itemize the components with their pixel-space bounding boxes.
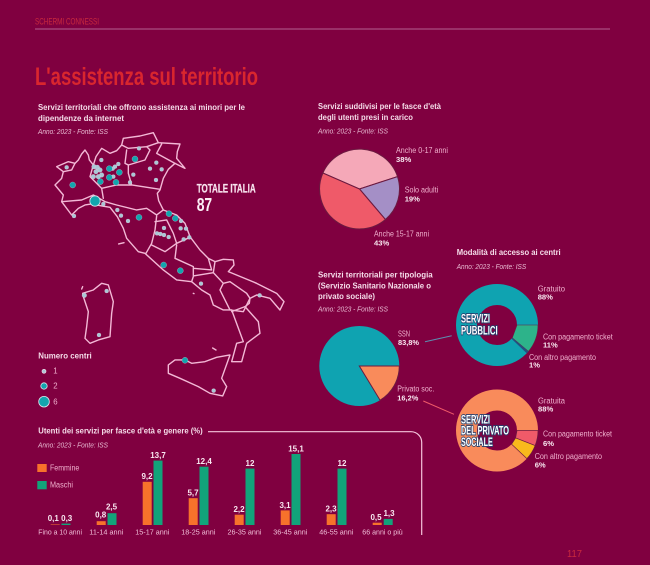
donut legend: private services: 6% <box>535 461 546 470</box>
donut label: public services: SERVIZI <box>461 313 490 325</box>
bar values: 2,2 <box>233 505 245 514</box>
panel: type heading: privato sociale) <box>318 291 375 301</box>
bar values: 5,7 <box>187 488 199 498</box>
donut label: private services: SOCIALE <box>461 437 493 449</box>
pie labels: age bands: Anche 0-17 anni <box>396 146 448 155</box>
map: small islands <box>119 243 216 350</box>
panel: map heading: Anno: 2023 - Fonte: ISS <box>37 127 108 136</box>
age band labels: Fino a 10 anni <box>38 528 82 536</box>
map: Sardinia <box>82 283 113 343</box>
bar values: 0,5 <box>370 513 382 522</box>
panel: age bands heading: Servizi suddivisi per le fasce d'età <box>318 101 441 111</box>
panel: type heading: Anno: 2023 - Fonte: ISS <box>317 305 388 314</box>
donut legend: public services: 88% <box>538 292 553 302</box>
bar values: 12 <box>246 459 255 468</box>
total Italy: TOTALE ITALIA <box>197 183 256 195</box>
age band labels: 11-14 anni <box>89 528 124 536</box>
pie labels: age bands: 19% <box>405 195 420 204</box>
donut label: private services: DEL PRIVATO <box>461 426 509 438</box>
donut legend: private services <box>535 396 613 470</box>
donut legend: public services <box>529 285 613 370</box>
donut legend: public services: Gratuito <box>538 285 566 294</box>
title: L'assistenza sul territorio <box>35 63 258 91</box>
pie labels: age bands: Solo adulti <box>405 186 438 195</box>
donut label: private services: SERVIZI <box>461 414 490 426</box>
pie labels: age bands <box>374 146 448 248</box>
age band labels: 36-45 anni <box>273 528 308 536</box>
panel: access heading <box>456 247 561 271</box>
section header: SCHERMI CONNESSI <box>35 16 99 26</box>
chart source: Anno: 2023 - Fonte: ISS <box>37 440 108 449</box>
bar values: 1,3 <box>383 509 395 518</box>
donut legend: public services: 11% <box>543 340 558 350</box>
map legend: 2 <box>53 382 58 390</box>
map of Italy <box>55 133 284 396</box>
donut legend: private services: 88% <box>538 405 553 414</box>
map: service dot, six centres <box>90 196 100 206</box>
panel: type heading: (Servizio Sanitario Nazionale o <box>318 280 431 290</box>
pie labels: service type <box>397 330 434 403</box>
bar values: 9,2 <box>141 472 153 481</box>
pie chart: service type <box>319 326 399 406</box>
connector: public services <box>425 336 452 342</box>
age band labels: 26-35 anni <box>228 528 262 536</box>
panel: map heading: dipendenze da internet <box>38 113 124 123</box>
map legend: 1 <box>53 366 58 376</box>
bar values: 2,5 <box>106 502 118 512</box>
panel: users by age and gender <box>37 425 422 536</box>
donut chart: public services <box>466 294 538 356</box>
donut legend: private services: Con altro pagamento <box>535 452 603 461</box>
map legend: Numero centri <box>38 350 92 360</box>
donut label: public services: PUBBLICI <box>461 325 498 337</box>
age band labels: 46-55 anni <box>319 528 354 536</box>
panel: access heading: Anno: 2023 - Fonte: ISS <box>456 262 526 271</box>
chart legend: Femmine <box>50 464 79 473</box>
bar values: 12 <box>338 459 347 468</box>
donut label: public services <box>461 313 498 337</box>
chart heading: Utenti dei servizi per fasce d'età e genere (%) <box>38 425 203 435</box>
bar values: 3,1 <box>279 501 291 510</box>
donut legend: private services: Con pagamento ticket <box>543 430 613 439</box>
pie labels: service type: Privato soc. <box>397 385 434 394</box>
chart legend: Maschi <box>50 481 73 490</box>
donut legend: private services: Gratuita <box>538 396 566 405</box>
bar chart <box>38 444 403 536</box>
panel: type heading <box>317 270 433 314</box>
donut legend: public services: Con altro pagamento <box>529 353 597 362</box>
map: Sicily <box>168 355 230 396</box>
chart frame <box>208 432 422 535</box>
panel: map heading <box>37 102 245 136</box>
map legend <box>38 350 92 407</box>
bar values: 13,7 <box>150 451 166 460</box>
bar values: 15,1 <box>288 444 304 454</box>
donut legend: private services: 6% <box>543 439 554 448</box>
map: service dots, one centre <box>65 146 262 393</box>
chart legend <box>37 464 79 490</box>
pie labels: age bands: Anche 15-17 anni <box>374 230 429 239</box>
total Italy <box>197 183 256 215</box>
pie labels: service type: SSN <box>398 330 410 339</box>
pie chart: age bands <box>320 149 399 229</box>
pie labels: service type: 83,8% <box>398 338 419 347</box>
donut legend: public services: Con pagamento ticket <box>543 332 613 341</box>
panel: age bands heading: Anno: 2023 - Fonte: ISS <box>317 126 388 136</box>
bar values: 2,3 <box>325 504 337 514</box>
map: service dots, two centres <box>70 156 188 363</box>
bar values: 0,1 <box>48 514 59 523</box>
panel: age bands heading: degli utenti presi in carico <box>318 112 413 122</box>
pie labels: service type: 16,2% <box>397 394 419 403</box>
connector: private services <box>423 401 454 414</box>
panel: map heading: Servizi territoriali che offrono assistenza ai minori per le <box>38 102 245 112</box>
age band labels: 15-17 anni <box>135 528 170 536</box>
donut label: private services <box>461 414 509 449</box>
bar values: 12,4 <box>196 457 212 466</box>
donut chart: private services <box>466 400 538 461</box>
age band labels <box>38 528 403 536</box>
age band labels: 18-25 anni <box>181 528 216 536</box>
panel: type heading: Servizi territoriali per tipologia <box>318 270 433 280</box>
bar values: 0,8 <box>95 510 107 519</box>
pie labels: age bands: 38% <box>396 155 411 164</box>
pie labels: age bands: 43% <box>374 239 389 248</box>
panel: age bands heading <box>317 101 441 136</box>
panel: access heading: Modalità di accesso ai centri <box>457 247 561 257</box>
donut legend: public services: 1% <box>529 360 540 370</box>
total Italy: 87 <box>197 195 212 215</box>
bar values: 0,3 <box>61 514 73 523</box>
page number: 117 <box>567 549 582 560</box>
map legend: 6 <box>53 398 58 406</box>
bar values <box>48 444 395 523</box>
age band labels: 66 anni o più <box>362 528 403 536</box>
